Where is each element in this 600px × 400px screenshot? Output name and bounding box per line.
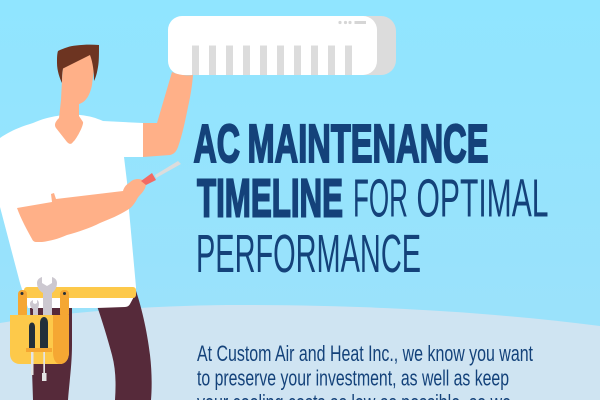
screwdriver <box>141 161 181 185</box>
title: TIMELINE <box>197 168 343 228</box>
shirt <box>0 114 143 308</box>
illustration: technician <box>0 45 193 400</box>
belt straps <box>18 290 69 318</box>
intro paragraph <box>197 341 533 400</box>
background wave <box>0 305 600 400</box>
icon: air conditioner <box>168 16 396 75</box>
hair <box>57 45 99 83</box>
tool belt <box>24 287 136 298</box>
pouch side <box>53 315 69 364</box>
title: FOR <box>353 168 408 228</box>
lowered forearm <box>17 179 146 242</box>
screwdrivers <box>29 317 48 348</box>
small wrench <box>30 300 39 316</box>
title <box>194 114 548 284</box>
neck and face <box>55 52 94 144</box>
raised arm <box>141 72 193 157</box>
screwdriver shafts <box>31 352 46 381</box>
wrench <box>37 277 57 316</box>
title: AC <box>194 114 240 174</box>
pouch band <box>26 348 52 352</box>
pants <box>30 288 152 400</box>
tool pouch <box>10 315 69 364</box>
